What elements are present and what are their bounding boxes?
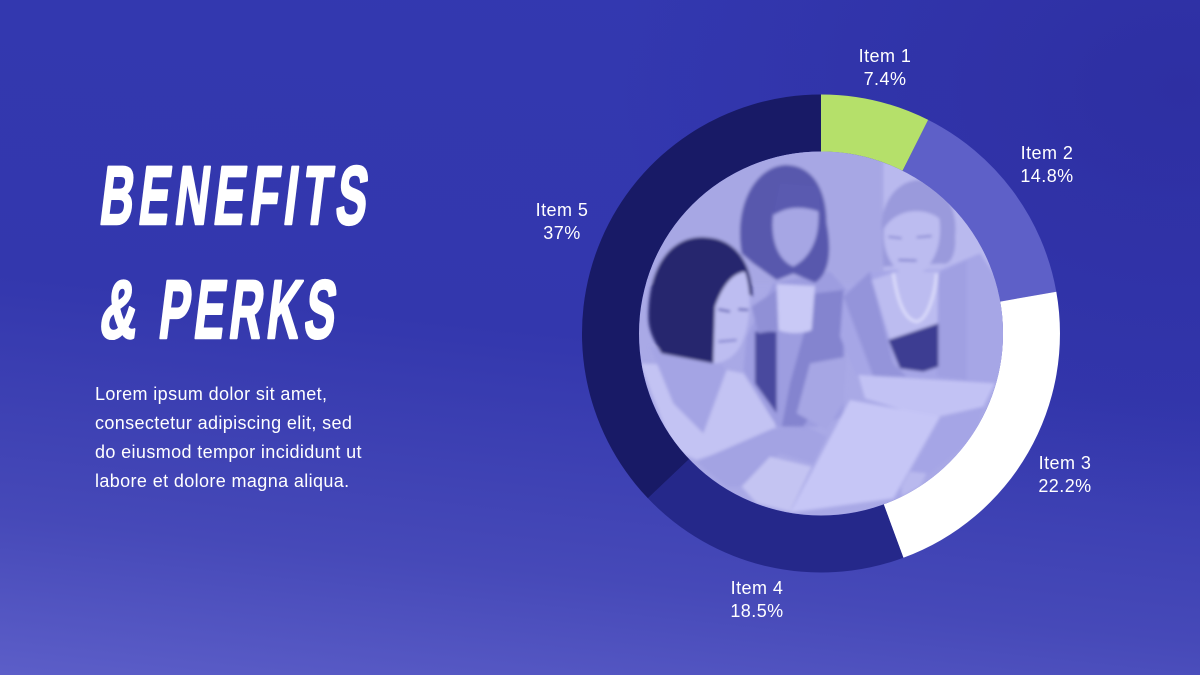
- label: item 2: Item 2: [1021, 143, 1073, 163]
- label: item 2: [1020, 143, 1074, 186]
- body text: labore et dolore magna aliqua.: [95, 471, 350, 491]
- title: [96, 150, 379, 356]
- label: item 2: 14.8%: [1020, 166, 1074, 186]
- title: PERKS: [155, 264, 347, 356]
- right woman body: [840, 253, 1005, 383]
- centre woman cardigan: [743, 272, 847, 427]
- left woman arm and hand: [720, 428, 778, 454]
- left woman face: [713, 272, 750, 363]
- body text: [95, 384, 362, 491]
- photo: three women reviewing papers: [639, 152, 1003, 516]
- segment: item 5: [582, 94, 821, 498]
- left woman hair: [648, 237, 753, 363]
- label: item 5: Item 5: [536, 200, 588, 220]
- hand on cup: [752, 290, 778, 333]
- front paper: [790, 400, 940, 513]
- left woman shirt: [640, 363, 777, 460]
- crumpled cloth: [742, 457, 812, 512]
- label: item 5: [536, 200, 588, 243]
- label: item 1: [859, 46, 911, 89]
- centre woman hair: [740, 165, 829, 283]
- label: item 3: Item 3: [1039, 453, 1091, 473]
- label: item 1: 7.4%: [864, 69, 906, 89]
- back paper: [858, 375, 995, 418]
- body text: do eiusmod tempor incididunt ut: [95, 442, 362, 462]
- centre woman face: [772, 203, 819, 267]
- label: item 4: 18.5%: [730, 601, 784, 621]
- label: item 5: 37%: [543, 223, 581, 243]
- segment: item 4: [648, 459, 903, 572]
- wall and window: [882, 162, 993, 274]
- segment: item 1: [821, 94, 928, 171]
- title: &: [96, 263, 144, 356]
- necklace: [893, 273, 937, 322]
- right woman face: [884, 211, 940, 278]
- body text: consectetur adipiscing elit, sed: [95, 413, 352, 433]
- donut chart: [582, 94, 1060, 572]
- label: item 4: Item 4: [731, 578, 783, 598]
- label: item 1: Item 1: [859, 46, 911, 66]
- body text: Lorem ipsum dolor sit amet,: [95, 384, 327, 404]
- right woman dark top: [888, 323, 938, 372]
- segment: item 3: [884, 292, 1060, 558]
- right woman hair: [882, 180, 956, 267]
- label: item 4: [730, 578, 784, 621]
- hand on paper: [902, 472, 927, 497]
- label: item 3: 22.2%: [1038, 476, 1092, 496]
- title: BENEFITS: [96, 150, 379, 242]
- coffee cup: [777, 284, 815, 333]
- right woman lower body: [968, 428, 977, 442]
- label: item 3: [1038, 453, 1092, 496]
- segment: item 2: [903, 120, 1056, 302]
